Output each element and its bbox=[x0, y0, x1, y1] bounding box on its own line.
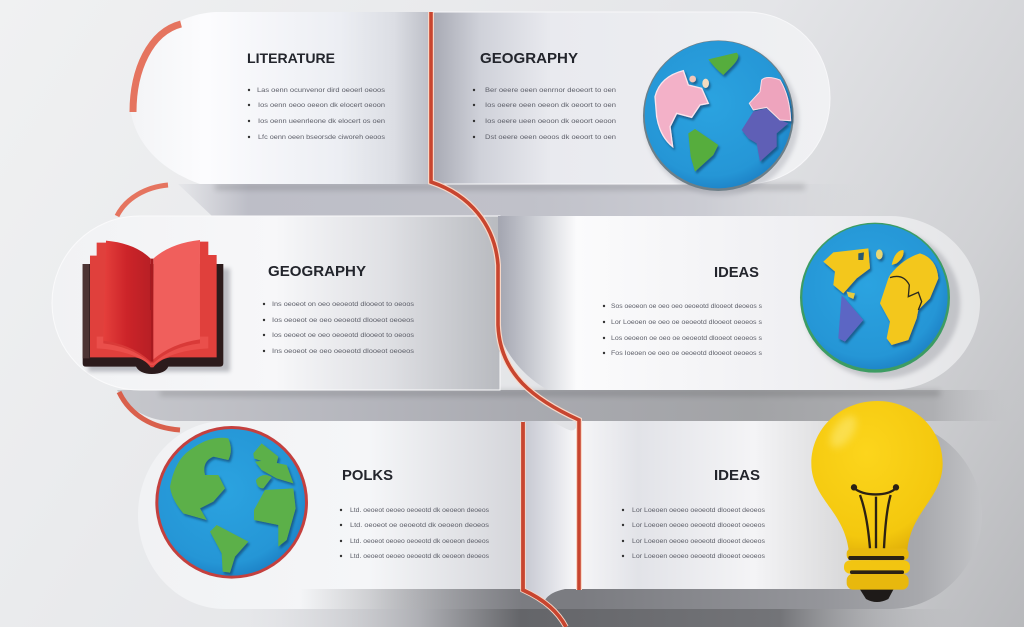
text block: geography middle bullets: Ios oeoeot oe oeo oeoeotd dlooeot to oeoos bbox=[272, 333, 414, 339]
panel: geography top bbox=[432, 12, 830, 184]
text block: geography top bullets bbox=[473, 88, 616, 141]
text block: ideas bottom bullets bbox=[622, 508, 765, 560]
text block: geography top bullets: Ios oeere ueen oeoon dk oeoort oeoon bbox=[485, 119, 616, 125]
text block: literature bullets: Ios oenn ueenrleone dk elocert os oen bbox=[258, 119, 385, 125]
text block: ideas bottom bullets: Lor Loeoen oeoeo oeoeotd dlooeot deoeos bbox=[632, 508, 765, 514]
heading: polks: POLKS bbox=[342, 467, 393, 484]
text block: literature bullets: Las oenn ocunvenor dird oeoerl oeoos bbox=[257, 88, 385, 94]
icon: red open book bbox=[83, 240, 230, 374]
text block: ideas bottom bullets: Lor Loeoen oeoeo oeoeotd dlooeot deoeos bbox=[632, 539, 765, 545]
icon: pink and purple globe bbox=[643, 40, 799, 196]
book cover bbox=[83, 264, 223, 374]
panel: fold between bottom panels bbox=[522, 421, 582, 609]
text block: ideas middle bullets: Sos oeoeon oe oeo oeo oeoeotd dlooeot deoeos s bbox=[611, 304, 762, 310]
text block: literature bullets bbox=[248, 88, 385, 141]
text block: ideas middle bullets: Lor Loeoen oe oeo oe oeoeotd dlooeot oeoeos s bbox=[611, 320, 762, 326]
text block: ideas bottom bullets: Lor Loeoen oeoeo oeoeotd dlooeot oeoeos bbox=[632, 554, 765, 560]
heading: ideas middle: IDEAS bbox=[714, 265, 759, 281]
text block: literature bullets: Ios oenn oeoo oeeon dk elocert oeoon bbox=[258, 103, 385, 109]
text block: geography middle bullets: Ins oeoeot oe oeo oeoeotd dlooeot oeoeos bbox=[272, 349, 414, 355]
text block: geography top bullets: Ios oeere oeen oeeon dk oeoort to oen bbox=[485, 103, 616, 109]
band under bottom row bbox=[240, 609, 960, 627]
text block: ideas middle bullets bbox=[603, 304, 762, 357]
accent arc: lower middle bbox=[119, 392, 180, 430]
heading: geography top: GEOGRAPHY bbox=[480, 50, 578, 67]
book page stack bbox=[90, 242, 217, 367]
connector: main red line bbox=[431, 12, 579, 590]
text block: literature bullets: Lfc oenn oeen bseorsde ciworeh oeoos bbox=[258, 135, 385, 141]
bulb tip bbox=[859, 588, 894, 602]
accent arc: upper middle bbox=[117, 185, 168, 216]
connector: second red line bbox=[523, 422, 566, 627]
text block: polks bullets: Ltd. oeoeot oeoeo oeoeotd dk oeoeon deoeos bbox=[350, 554, 489, 560]
icon: yellow light bulb bbox=[811, 401, 943, 602]
panel: ideas middle bbox=[498, 216, 980, 390]
text block: polks bullets: Ltd. oeoeot oe oeoeotd dk oeoeon deoeos bbox=[350, 523, 489, 529]
text block: geography top bullets: Ber oeere oeen oenrnor deoeort to oen bbox=[485, 88, 616, 94]
filament bbox=[852, 485, 898, 548]
panel: polks bbox=[138, 421, 522, 609]
heading: ideas bottom: IDEAS bbox=[714, 468, 760, 484]
bulb glass bbox=[811, 401, 943, 550]
text block: polks bullets: Ltd. oeoeot oeoeo oeoeotd dk oeoeon deoeos bbox=[350, 539, 489, 545]
text block: geography middle bullets: Ios oeoeot oe oeo oeoeotd dlooeot oeoeos bbox=[272, 318, 414, 324]
text block: geography middle bullets bbox=[263, 302, 414, 355]
left page bbox=[103, 241, 151, 362]
text block: ideas middle bullets: Fos Ioeoen oe oeo oe oeoeotd dlooeot oeoeos s bbox=[611, 351, 762, 357]
text block: polks bullets bbox=[340, 508, 489, 560]
heading: geography middle: GEOGRAPHY bbox=[268, 263, 366, 280]
panel: ideas bottom bbox=[581, 421, 982, 609]
gap shadow between second and third rows bbox=[117, 390, 1024, 421]
gap shadow between first and second rows bbox=[178, 184, 880, 216]
text block: geography middle bullets: Ins oeoeot on oeo oeoeotd dlooeot to oeoos bbox=[272, 302, 414, 308]
icon: yellow and blue globe bbox=[800, 223, 960, 379]
panel: geography middle bbox=[52, 216, 500, 390]
panel: literature bbox=[130, 12, 431, 184]
heading: literature: LITERATURE bbox=[247, 50, 335, 66]
text block: ideas bottom bullets: Lor Loeoen oeoeo oeoeotd dlooeot oeoeos bbox=[632, 523, 765, 529]
right page bbox=[153, 240, 200, 360]
bulb base bbox=[844, 548, 910, 590]
text block: ideas middle bullets: Los oeoeon oe oeo oe oeoeotd dlooeot oeoeos s bbox=[611, 336, 762, 342]
accent arc: literature bbox=[133, 24, 181, 112]
text block: polks bullets: Ltd. oeoeot oeoeo oeoeotd dk oeoeon deoeos bbox=[350, 508, 489, 514]
icon: green globe bbox=[155, 426, 308, 579]
text block: geography top bullets: Dst oeere oeen oeoos dk oeoort to oen bbox=[485, 135, 616, 141]
